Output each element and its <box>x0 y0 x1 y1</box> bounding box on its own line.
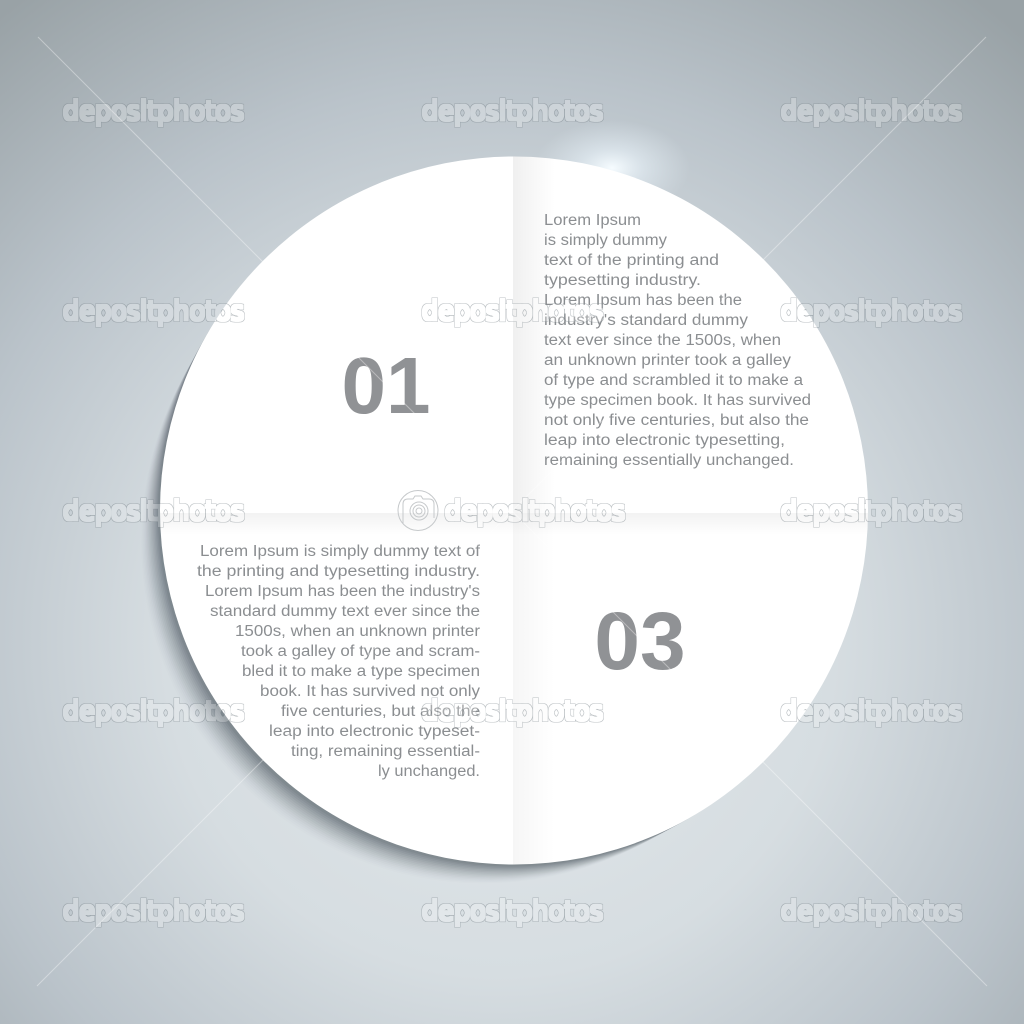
text block: top right: is simply dummy <box>544 232 667 249</box>
text block: top right: of type and scrambled it to make a <box>544 372 803 389</box>
light glow behind circle <box>534 120 690 216</box>
text block: top right: typesetting industry. <box>544 272 701 289</box>
text block: bottom left: Lorem Ipsum is simply dummy text of <box>200 543 481 560</box>
number 01: 01 <box>342 341 430 430</box>
text block: top right: text ever since the 1500s, when <box>544 332 781 349</box>
watermark text grid: depositphotos <box>781 896 962 927</box>
watermark text grid: depositphotos <box>781 96 962 127</box>
text block: top right: Lorem Ipsum has been the <box>544 292 742 309</box>
text block: bottom left: 1500s, when an unknown printer <box>235 623 480 640</box>
text block: bottom left: book. It has survived not only <box>260 683 480 700</box>
panel: white paper circle <box>150 150 880 873</box>
text block: bottom left: took a galley of type and scram- <box>241 643 480 660</box>
text block: bottom left: ting, remaining essential- <box>291 743 480 760</box>
text block: top right: type specimen book. It has survived <box>544 392 811 409</box>
text block: bottom left: leap into electronic typeset- <box>269 723 480 740</box>
text block: bottom left: five centuries, but also the <box>281 703 480 720</box>
text block: top right <box>544 212 811 469</box>
text block: bottom left: standard dummy text ever since the <box>210 603 480 620</box>
watermark text grid: depositphotos <box>63 496 244 527</box>
watermark text grid: depositphotos <box>781 696 962 727</box>
watermark text grid: depositphotos <box>63 896 244 927</box>
text block: top right: leap into electronic typesetting, <box>544 432 785 449</box>
watermark text grid: depositphotos <box>445 496 625 527</box>
watermark text grid: depositphotos <box>63 96 244 127</box>
watermark text grid: depositphotos <box>422 896 603 927</box>
text block: top right: text of the printing and <box>544 252 719 269</box>
fold: creases <box>150 150 880 873</box>
text block: top right: Lorem Ipsum <box>544 212 641 229</box>
text block: top right: remaining essentially unchanged. <box>544 452 794 469</box>
circle drop shadow <box>141 160 864 883</box>
number 03: 03 <box>594 596 686 687</box>
icon: watermark camera logo <box>398 490 438 530</box>
text block: bottom left: the printing and typesetting industry. <box>197 563 480 580</box>
watermark text grid: depositphotos <box>781 296 962 327</box>
watermark text grid: depositphotos <box>422 96 603 127</box>
text block: top right: an unknown printer took a galley <box>544 352 791 369</box>
watermark text grid: depositphotos <box>422 696 603 727</box>
watermark text grid: depositphotos <box>781 496 962 527</box>
watermark text grid: depositphotos <box>63 296 244 327</box>
text block: bottom left <box>197 543 481 780</box>
text block: top right: industry's standard dummy <box>544 312 748 329</box>
text block: top right: not only five centuries, but also the <box>544 412 809 429</box>
watermark text grid: depositphotos <box>63 696 244 727</box>
watermark text grid <box>63 96 962 927</box>
text block: bottom left: ly unchanged. <box>378 763 480 780</box>
watermark text grid: depositphotos <box>422 296 603 327</box>
text block: bottom left: bled it to make a type specimen <box>242 663 480 680</box>
text block: bottom left: Lorem Ipsum has been the industry's <box>205 583 480 600</box>
